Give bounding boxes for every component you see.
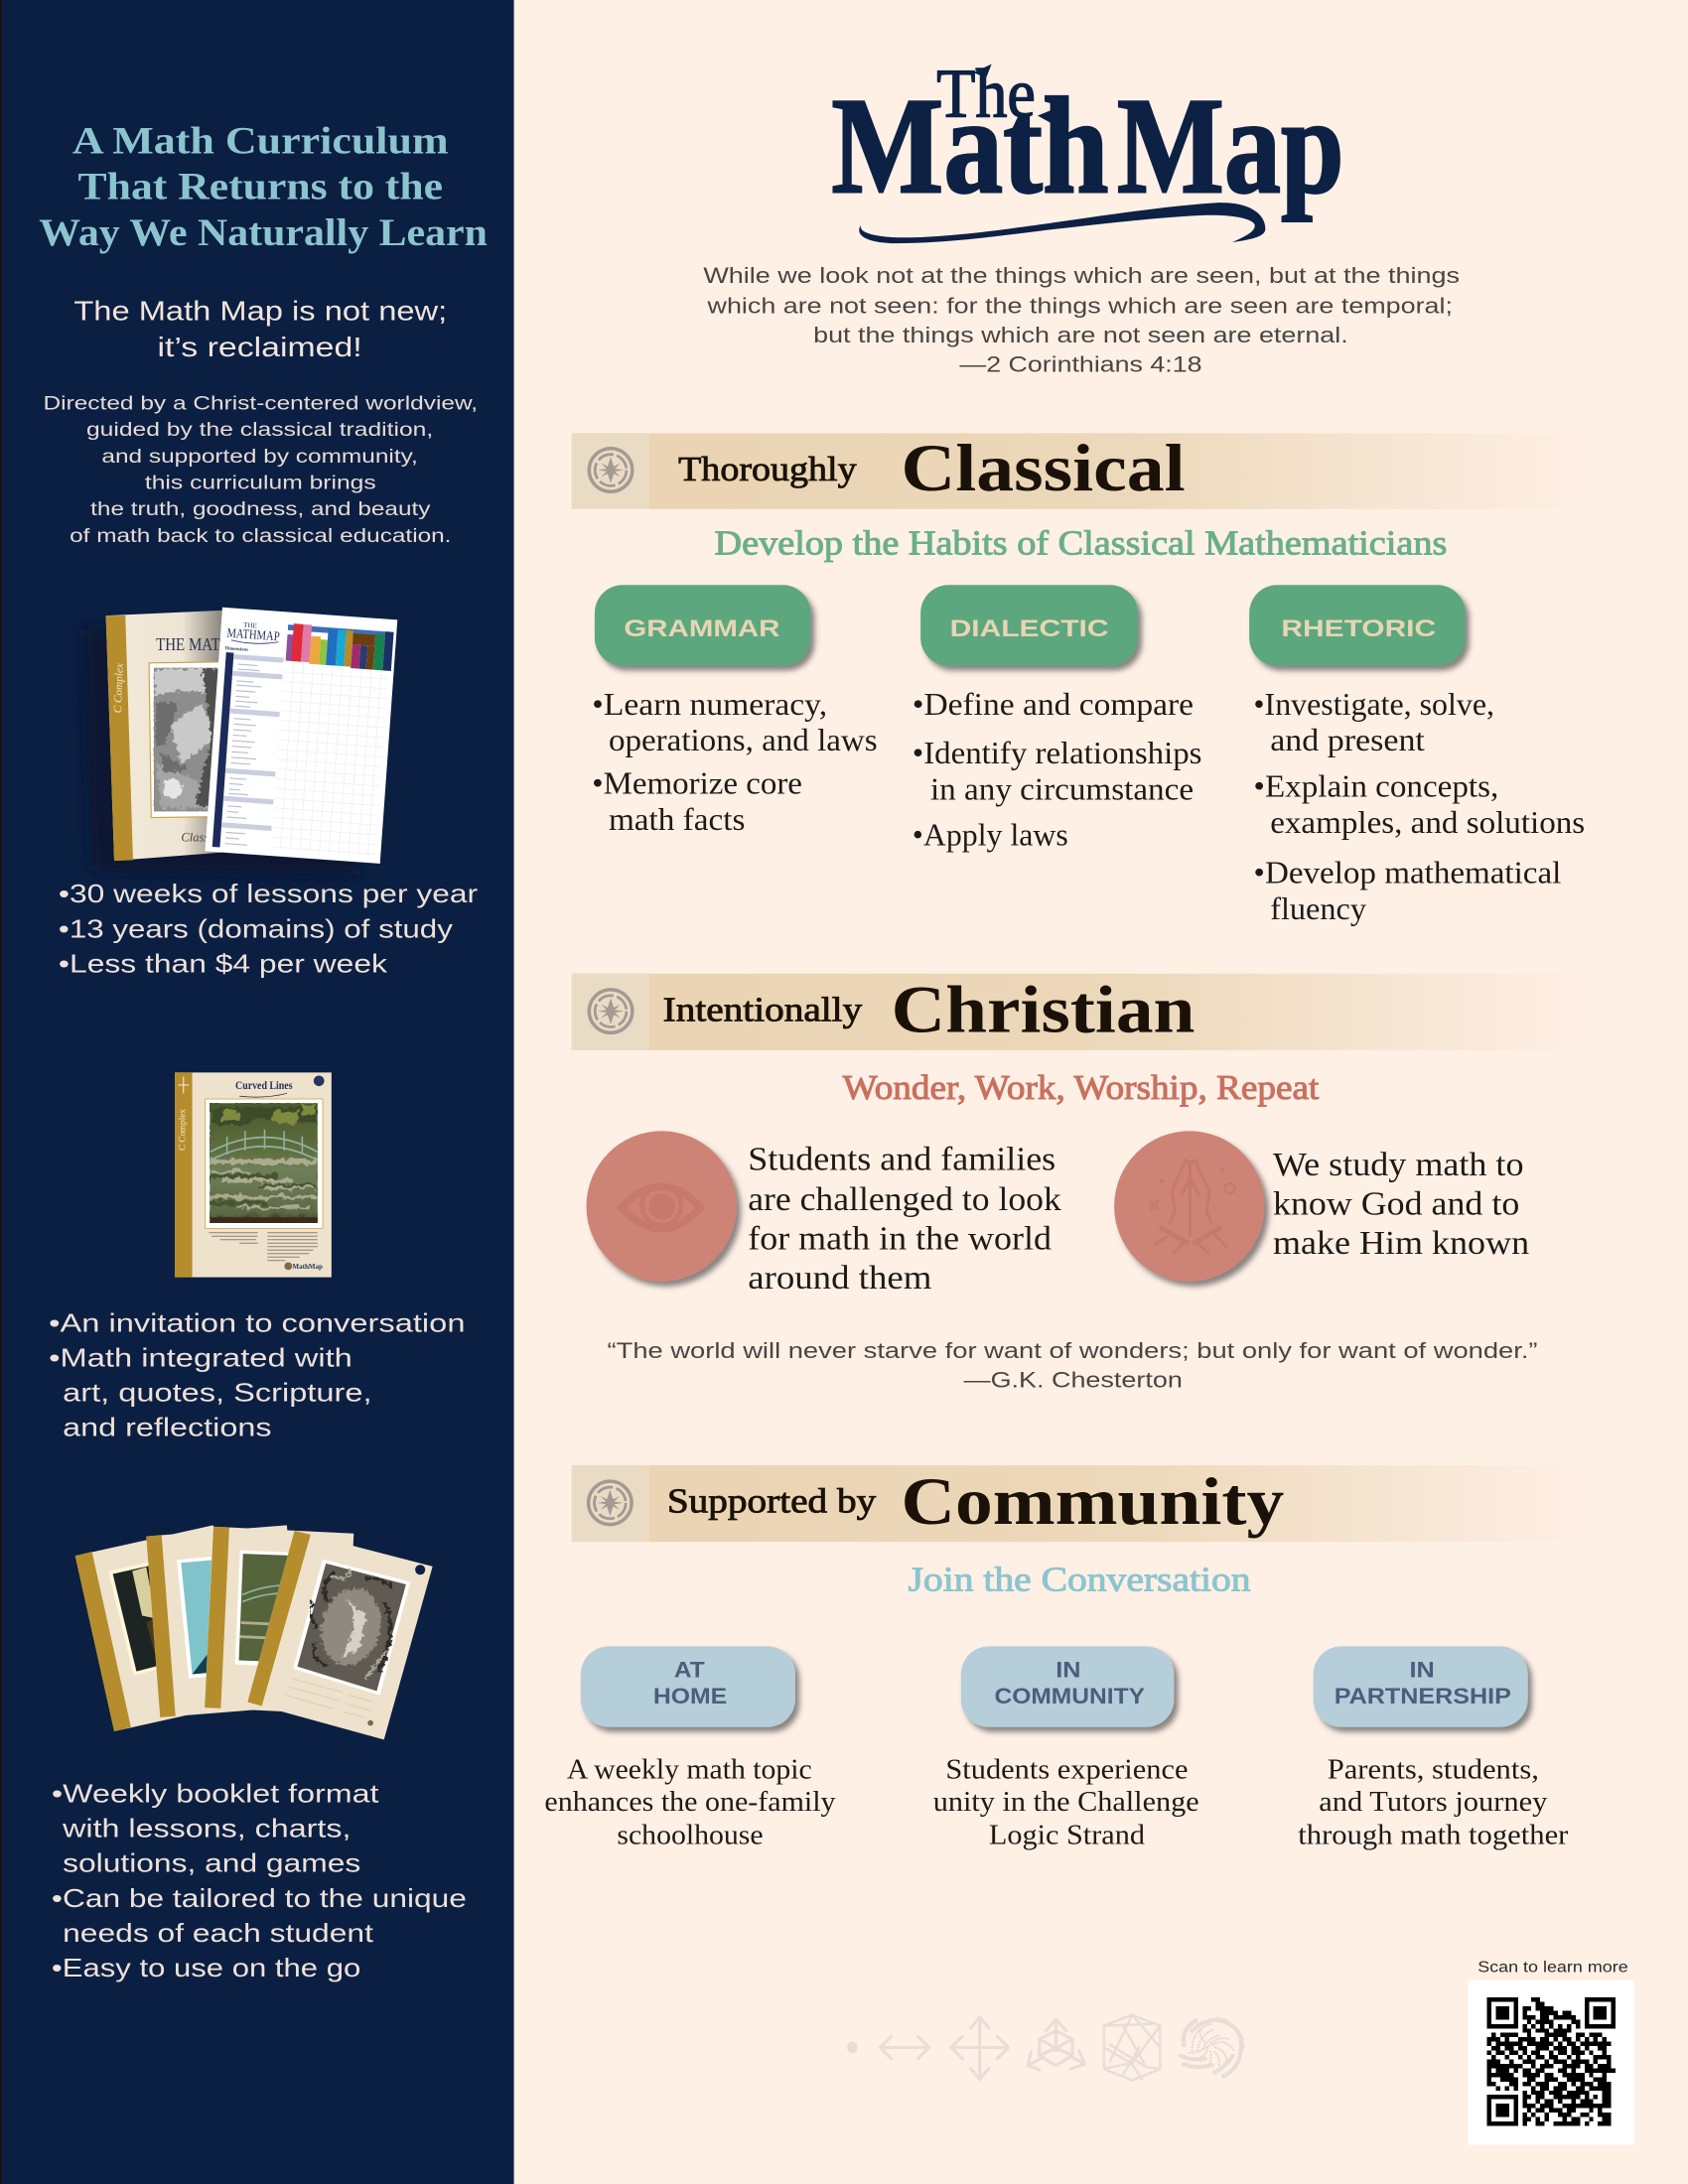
scripture quote: but the things which are not seen are eternal. [813, 323, 1348, 347]
label: scan to learn more: Scan to learn more [1477, 1959, 1628, 1977]
bullet list: conversation features: •An invitation to conversation [49, 1309, 465, 1337]
image: curriculum book and scope chart: Classical [181, 830, 228, 844]
scripture quote: While we look not at the things which are seen, but at the things [703, 263, 1460, 288]
icon: praying hands in circle [1114, 1131, 1265, 1282]
icon: eye in circle [587, 1131, 737, 1282]
text: look for math: for math in the world [748, 1221, 1052, 1258]
bullet list: curriculum facts: •13 years (domains) of study [59, 915, 453, 943]
Chesterton quote: “The world will never starve for want of wonders; but only for want of wonder.” [608, 1338, 1538, 1363]
sidebar description: and supported by community, [101, 446, 418, 468]
text: know God: make Him known [1273, 1225, 1529, 1262]
column: in community: Logic Strand [989, 1821, 1145, 1851]
column: Rhetoric: examples, and solutions [1270, 805, 1585, 840]
column: Dialectic: in any circumstance [930, 771, 1194, 806]
column: in community: Students experience [945, 1755, 1188, 1786]
section banner: Christian [572, 973, 1589, 1050]
section banner: Community: Supported by [667, 1482, 877, 1521]
column: in community [933, 1646, 1199, 1851]
Chesterton quote: —G.K. Chesterton [964, 1367, 1183, 1392]
section banner: Community [572, 1464, 1589, 1542]
column: Rhetoric: and present [1270, 723, 1425, 757]
bullet list: conversation features [49, 1309, 465, 1442]
sidebar description [43, 392, 478, 547]
image: Curved Lines lesson page [175, 1072, 332, 1278]
subheading: wonder, work, worship: Wonder, Work, Worship, Repeat [843, 1068, 1320, 1107]
subheading: join the conversation: Join the Conversation [909, 1560, 1251, 1598]
column: Dialectic: •Identify relationships [913, 736, 1201, 770]
image: curriculum book and scope chart [83, 608, 397, 875]
column: Grammar: •Learn numeracy, [592, 687, 827, 722]
column: in partnership: PARTNERSHIP [1335, 1684, 1511, 1708]
logo: The Math Map: Math [831, 69, 1109, 222]
bullet list: booklet features: needs of each student [63, 1920, 374, 1948]
text: look for math [748, 1142, 1061, 1297]
column: at home: A weekly math topic [567, 1755, 812, 1786]
bullet list: curriculum facts [59, 881, 479, 978]
column: Grammar: operations, and laws [609, 723, 878, 757]
column: Grammar [592, 585, 878, 837]
column: Rhetoric: •Develop mathematical [1253, 856, 1562, 890]
section banner: Classical [572, 431, 1589, 509]
bullet list: curriculum facts: •30 weeks of lessons per year [59, 881, 479, 908]
image: Curved Lines lesson page: Curved Lines [235, 1078, 293, 1092]
text: look for math: are challenged to look [748, 1181, 1061, 1218]
panel: Supported by Community [544, 1464, 1589, 1851]
image: curriculum book and scope chart: MATHMAP [226, 625, 280, 643]
text: know God: We study math to [1273, 1147, 1523, 1183]
column: Grammar: math facts [609, 802, 745, 837]
bullet list: conversation features: •Math integrated with [49, 1344, 352, 1372]
subheading: classical habits: Develop the Habits of Classical Mathematicians [715, 523, 1447, 562]
scripture quote: which are not seen: for the things which are seen are temporal; [706, 294, 1453, 319]
column: at home: AT [674, 1657, 706, 1682]
bullet list: booklet features [52, 1781, 467, 1982]
panel: left sidebar [0, 0, 514, 2184]
column: Grammar: •Memorize core [592, 766, 802, 801]
sidebar heading [39, 119, 488, 254]
image: curriculum book and scope chart: Dimensions [224, 646, 248, 653]
bullet list: booklet features: •Easy to use on the go [52, 1955, 360, 1982]
text: look for math: around them [748, 1260, 931, 1297]
sidebar description: the truth, goodness, and beauty [90, 498, 431, 520]
column: in partnership: IN [1409, 1657, 1435, 1682]
column: at home: schoolhouse [617, 1821, 764, 1851]
section banner: Classical: Thoroughly [678, 450, 857, 488]
sidebar heading: A Math Curriculum [72, 119, 449, 162]
column: at home: HOME [653, 1684, 727, 1708]
column: Rhetoric: •Investigate, solve, [1253, 687, 1494, 722]
section banner: Christian: Christian [892, 973, 1195, 1047]
column: in partnership: and Tutors journey [1319, 1787, 1547, 1818]
sidebar description: this curriculum brings [145, 472, 376, 493]
image: curriculum book and scope chart: THE MAT [156, 634, 220, 654]
sidebar tagline [73, 296, 447, 362]
text: know God [1273, 1147, 1529, 1262]
sidebar heading: Way We Naturally Learn [39, 211, 488, 254]
column: Dialectic [913, 585, 1201, 853]
sidebar description: Directed by a Christ-centered worldview, [43, 392, 478, 415]
column: in partnership [1298, 1646, 1569, 1851]
column: in community: unity in the Challenge [933, 1787, 1199, 1818]
panel: Thoroughly Classical [572, 431, 1589, 926]
column: Rhetoric: •Explain concepts, [1253, 769, 1498, 804]
sidebar description: of math back to classical education. [70, 525, 451, 547]
image: Curved Lines lesson page: MathMap [293, 1263, 323, 1271]
section banner: Christian: Intentionally [663, 990, 863, 1028]
column: Rhetoric: RHETORIC [1281, 615, 1436, 642]
sidebar tagline: it’s reclaimed! [157, 332, 362, 362]
bullet list: booklet features: with lessons, charts, [62, 1816, 351, 1843]
section banner: Classical: Classical [902, 431, 1186, 505]
column: Dialectic: •Define and compare [913, 687, 1194, 722]
sidebar description: guided by the classical tradition, [86, 419, 433, 441]
bullet list: booklet features: •Weekly booklet format [52, 1781, 380, 1809]
column: at home [544, 1646, 836, 1851]
logo: The Math Map [831, 55, 1344, 243]
bullet list: conversation features: art, quotes, Scripture, [63, 1379, 372, 1407]
column: at home: enhances the one-family [544, 1787, 836, 1818]
bullet list: curriculum facts: •Less than $4 per week [59, 950, 387, 978]
panel: Intentionally Christian [572, 973, 1589, 1392]
section banner: Community: Community [902, 1464, 1284, 1539]
Chesterton quote [608, 1338, 1538, 1392]
bullet list: booklet features: •Can be tailored to the unique [52, 1885, 467, 1913]
scripture quote [703, 263, 1460, 377]
bullet list: conversation features: and reflections [63, 1415, 272, 1442]
sidebar heading: That Returns to the [78, 166, 443, 208]
column: in partnership: Parents, students, [1328, 1755, 1539, 1786]
image: curriculum book and scope chart: C Complex [112, 663, 126, 713]
image: curriculum book and scope chart: THE [243, 621, 257, 630]
column: Dialectic: DIALECTIC [950, 615, 1109, 642]
icons: dimension progression [847, 2015, 1242, 2081]
bullet list: booklet features: solutions, and games [63, 1850, 360, 1878]
logo: The Math Map: The [936, 55, 1036, 132]
sidebar tagline: The Math Map is not new; [73, 296, 447, 327]
column: Rhetoric: fluency [1270, 891, 1366, 926]
scripture quote: —2 Corinthians 4:18 [959, 352, 1201, 377]
QR code [1468, 1980, 1634, 2145]
column: Grammar: GRAMMAR [624, 615, 779, 642]
image: fan of weekly booklets [75, 1525, 433, 1739]
text: know God: know God and to [1273, 1185, 1519, 1222]
column: in community: IN [1055, 1657, 1080, 1682]
logo: The Math Map: Map [1117, 69, 1344, 222]
column: in partnership: through math together [1298, 1821, 1569, 1851]
column: in community: COMMUNITY [994, 1684, 1146, 1708]
text: look for math: Students and families [748, 1142, 1055, 1178]
image: Curved Lines lesson page: C Complex [178, 1109, 188, 1151]
column: Dialectic: •Apply laws [913, 818, 1068, 853]
column: Rhetoric [1249, 585, 1585, 926]
